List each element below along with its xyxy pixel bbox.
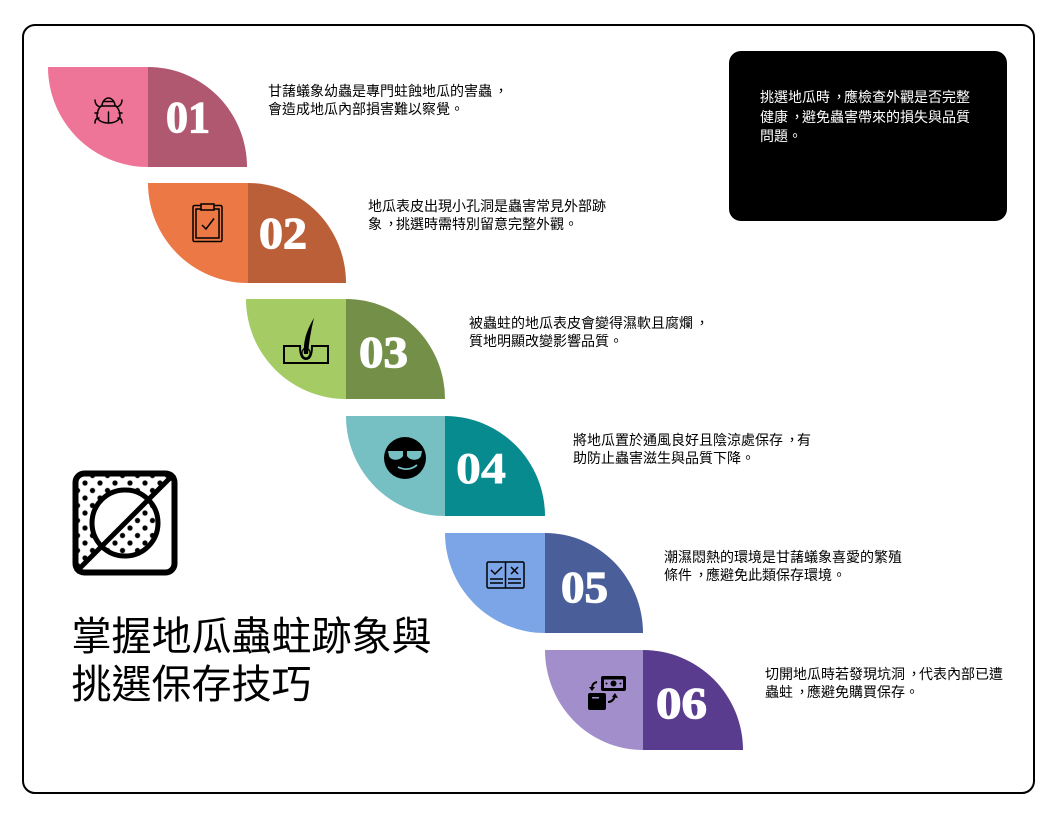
step 06 description: 切開地瓜時若發現坑洞，代表內部已遭 bbox=[765, 664, 1003, 684]
step 04 right leaf bbox=[445, 416, 545, 516]
step 02 left leaf bbox=[148, 183, 248, 283]
step 05 number: 05 bbox=[561, 563, 608, 612]
step 04 bbox=[346, 416, 811, 516]
step 06 description: 蟲蛀，應避免購買保存。 bbox=[765, 682, 919, 702]
icon: skin with hair bbox=[284, 318, 328, 363]
title: 挑選保存技巧 bbox=[72, 652, 312, 710]
step 01 left leaf bbox=[48, 67, 148, 167]
step 06 left leaf bbox=[545, 650, 643, 750]
step 01 description: 會造成地瓜內部損害難以察覺。 bbox=[268, 99, 464, 119]
icon: check and cross book bbox=[487, 562, 524, 588]
step 01 right leaf bbox=[148, 67, 247, 167]
icon: sunglasses face bbox=[384, 437, 426, 479]
step 01 bbox=[48, 67, 508, 167]
title: 掌握地瓜蟲蛀跡象與 bbox=[72, 604, 432, 662]
callout text: 挑選地瓜時，應檢查外觀是否完整 bbox=[760, 87, 970, 107]
step 02 right leaf bbox=[248, 183, 346, 283]
step 06 right leaf bbox=[643, 650, 743, 750]
step 06 bbox=[545, 650, 1003, 750]
step 03 description: 被蟲蛀的地瓜表皮會變得濕軟且腐爛， bbox=[469, 313, 709, 333]
callout: black tip box bbox=[729, 51, 1007, 221]
step 05 right leaf bbox=[545, 533, 643, 633]
step 05 bbox=[445, 533, 902, 633]
step 02 bbox=[148, 183, 606, 283]
step 04 number: 04 bbox=[456, 444, 506, 493]
step 01 number: 01 bbox=[166, 93, 210, 142]
step 03 right leaf bbox=[346, 299, 445, 399]
step 04 description: 助防止蟲害滋生與品質下降。 bbox=[573, 448, 755, 468]
step 02 number: 02 bbox=[259, 209, 307, 258]
step 04 left leaf bbox=[346, 416, 445, 516]
icon: clipboard bbox=[193, 204, 222, 242]
step 05 left leaf bbox=[445, 533, 545, 633]
icon: goods and money exchange bbox=[588, 676, 626, 710]
step 03 description: 質地明顯改變影響品質。 bbox=[469, 331, 623, 351]
step 03 number: 03 bbox=[359, 328, 408, 377]
callout text: 健康，避免蟲害帶來的損失與品質 bbox=[760, 107, 970, 127]
step 04 description: 將地瓜置於通風良好且陰涼處保存，有 bbox=[573, 430, 811, 450]
icon: beetle bbox=[95, 98, 122, 123]
icon: prohibited dotted circle bbox=[73, 471, 177, 575]
step 05 description: 潮濕悶熱的環境是甘藷蟻象喜愛的繁殖 bbox=[664, 547, 902, 567]
step 02 description: 象，挑選時需特別留意完整外觀。 bbox=[368, 214, 578, 234]
step 01 description: 甘藷蟻象幼蟲是專門蛀蝕地瓜的害蟲， bbox=[268, 81, 508, 101]
step 02 description: 地瓜表皮出現小孔洞是蟲害常見外部跡 bbox=[368, 196, 606, 216]
step 05 description: 條件，應避免此類保存環境。 bbox=[664, 565, 846, 585]
callout text: 問題。 bbox=[760, 126, 802, 146]
step 03 left leaf bbox=[246, 299, 346, 399]
step 03 bbox=[246, 299, 709, 399]
step 06 number: 06 bbox=[656, 679, 707, 728]
